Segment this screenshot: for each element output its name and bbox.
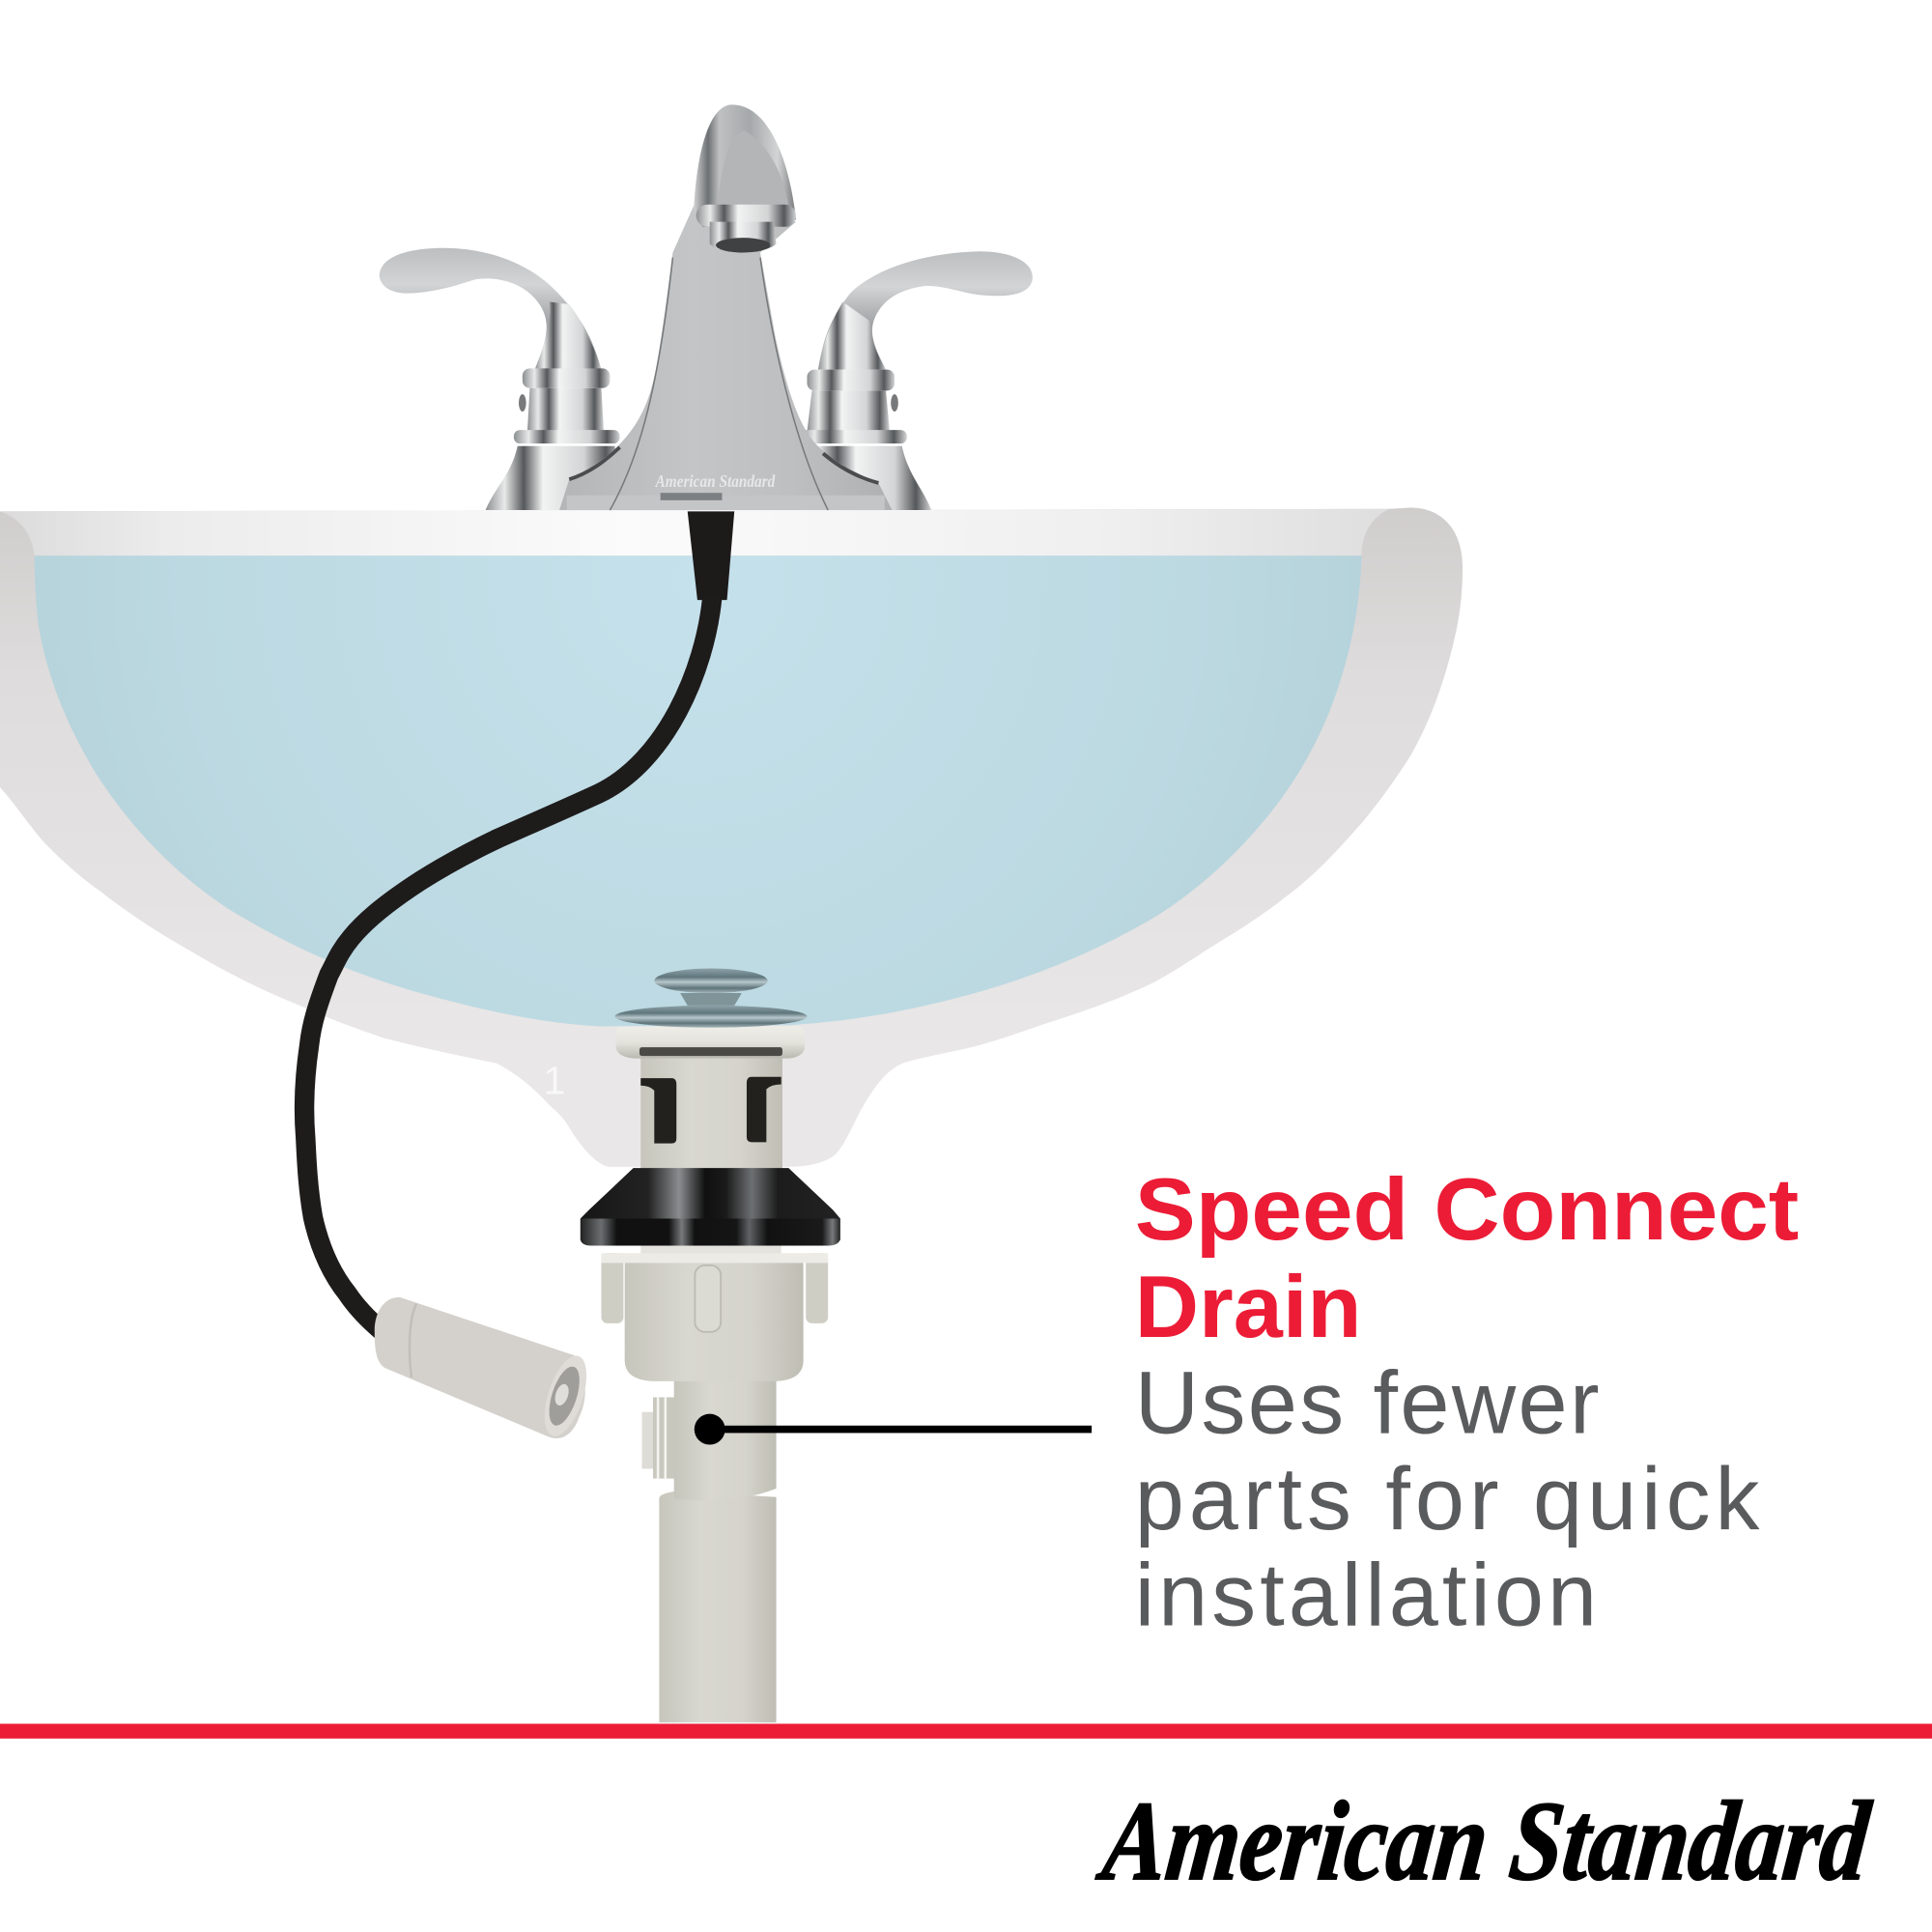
- callout heading: [1135, 1161, 1799, 1356]
- lower tailpiece: [659, 1491, 777, 1722]
- hose cable: [304, 598, 712, 1333]
- callout description: [1135, 1353, 1761, 1644]
- sink shell: [0, 508, 1463, 1167]
- right handle: [800, 251, 1033, 510]
- faucet seams: [610, 258, 828, 510]
- flange plate: [616, 1026, 805, 1059]
- callout text: [1135, 1161, 1799, 1644]
- callout heading: Drain: [1135, 1259, 1361, 1356]
- water basin: [35, 555, 1361, 1026]
- stray mark on sink: 1: [543, 1059, 565, 1103]
- callout heading: Speed Connect: [1135, 1161, 1799, 1259]
- faucet brand mark: American Standard: [655, 471, 776, 491]
- drain body: [640, 1054, 782, 1171]
- faucet body: [559, 206, 892, 510]
- threaded stub: [642, 1397, 675, 1479]
- speed connect drain assembly: [581, 969, 840, 1722]
- callout description: installation: [1135, 1546, 1597, 1644]
- aerator: [710, 222, 777, 252]
- callout description: parts for quick: [1135, 1450, 1761, 1548]
- locking nut: [601, 1246, 828, 1381]
- red divider bar: [0, 1723, 1932, 1739]
- faucet shadow crescents: [569, 447, 878, 483]
- spout highlight: [717, 130, 788, 207]
- sink basin cross-section: [0, 508, 1463, 1167]
- drain window left: [640, 1078, 676, 1144]
- spout collar: [696, 205, 796, 227]
- black collar: [581, 1168, 840, 1246]
- faucet base band: [567, 496, 885, 510]
- drain window right: [747, 1077, 781, 1142]
- faucet: [380, 104, 1033, 510]
- left handle: [380, 248, 622, 510]
- sink rim: [0, 509, 1390, 555]
- faucet lift rod slot: [661, 493, 722, 500]
- upper pipe: [674, 1374, 777, 1500]
- hose top sleeve: [688, 511, 734, 600]
- spout dome: [694, 104, 796, 227]
- stopper dome: [614, 969, 807, 1028]
- callout description: Uses fewer: [1135, 1353, 1600, 1452]
- flange shadow: [639, 1047, 782, 1056]
- callout leader line: [715, 1426, 1092, 1433]
- pull rod hose: [304, 511, 734, 1333]
- hose connector: [375, 1297, 595, 1441]
- callout dot: [695, 1414, 725, 1445]
